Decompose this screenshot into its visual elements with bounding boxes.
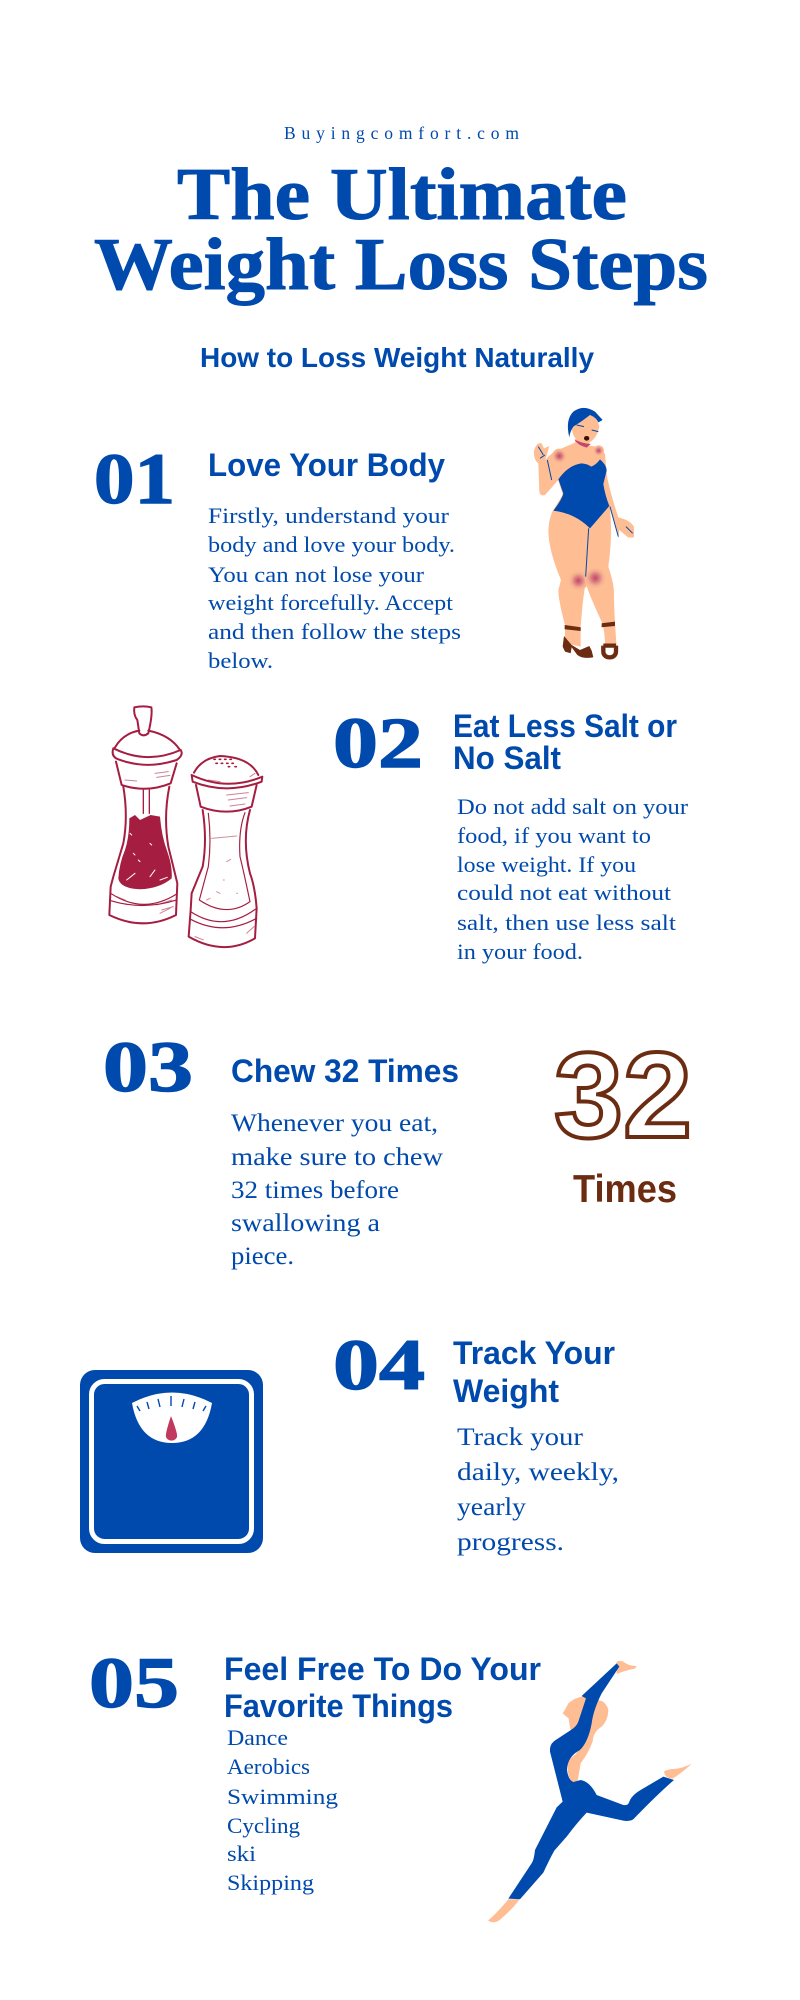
panel: step 1 love your body	[94, 408, 634, 673]
number 01: 01	[94, 439, 175, 519]
panel: step 3 chew 32 times	[103, 1027, 692, 1270]
body text: You can not lose your	[208, 562, 425, 587]
body text: lose weight. If you	[457, 852, 636, 877]
body text: make sure to chew	[231, 1142, 444, 1171]
heading: Chew 32 Times	[231, 1053, 459, 1089]
activity list: Cycling	[227, 1813, 300, 1838]
header	[94, 123, 708, 373]
body text: Firstly, understand your	[208, 503, 450, 528]
activity list	[227, 1725, 338, 1895]
activity list: Skipping	[227, 1870, 314, 1895]
body text: food, if you want to	[457, 823, 651, 848]
panel: step 5 favorite things	[89, 1643, 692, 1922]
heading	[453, 1335, 615, 1409]
body text: below.	[208, 648, 273, 673]
body text: Track your	[457, 1422, 584, 1451]
outlined number 32: 32	[554, 1027, 692, 1163]
site name: Buyingcomfort.com	[284, 123, 519, 143]
body text: progress.	[457, 1527, 564, 1556]
label times: Times	[573, 1168, 677, 1211]
heading: Track Your	[453, 1335, 615, 1371]
activity list: Dance	[227, 1725, 288, 1750]
heading	[453, 708, 677, 776]
body text	[457, 1422, 619, 1556]
body text	[231, 1108, 444, 1270]
callout: 32 times	[554, 1027, 692, 1211]
body text: body and love your body.	[208, 532, 455, 557]
body text: could not eat without	[457, 880, 672, 905]
subtitle: How to Loss Weight Naturally	[200, 342, 594, 373]
body text: and then follow the steps	[208, 619, 461, 644]
heading: Love Your Body	[208, 447, 445, 483]
icon: bathroom scale	[80, 1370, 263, 1553]
body text	[208, 503, 461, 673]
body text: swallowing a	[231, 1208, 380, 1237]
title	[94, 154, 708, 306]
number 03: 03	[103, 1027, 193, 1107]
heading: Feel Free To Do Your	[224, 1651, 541, 1687]
heading	[224, 1651, 541, 1724]
activity list: Aerobics	[227, 1754, 310, 1779]
number 05: 05	[89, 1643, 179, 1723]
body text: Do not add salt on your	[457, 794, 689, 819]
panel: step 2 eat less salt	[109, 703, 689, 964]
heading: Weight	[453, 1373, 559, 1409]
heading: Eat Less Salt or	[453, 708, 677, 744]
body text	[457, 794, 689, 964]
salt shaker	[189, 756, 262, 947]
icon: woman in blue swimsuit	[534, 408, 634, 658]
activity list: ski	[227, 1841, 256, 1866]
scale needle	[166, 1416, 177, 1441]
heading: Favorite Things	[224, 1688, 453, 1724]
body text: yearly	[457, 1492, 526, 1521]
number 02: 02	[333, 703, 423, 783]
heading: No Salt	[453, 740, 561, 776]
title: The Ultimate	[177, 154, 627, 236]
icon: leaping dancer	[488, 1661, 692, 1922]
body text: piece.	[231, 1241, 294, 1270]
activity list: Swimming	[227, 1784, 338, 1809]
number 04: 04	[333, 1325, 425, 1405]
scale dial	[132, 1392, 212, 1443]
icon: pepper mill and salt shaker	[109, 706, 262, 947]
body text: weight forcefully. Accept	[208, 590, 454, 615]
pepper mill	[109, 706, 182, 923]
body text: 32 times before	[231, 1175, 399, 1204]
panel: step 4 track your weight	[80, 1325, 619, 1556]
body text: Whenever you eat,	[231, 1108, 438, 1137]
body text: daily, weekly,	[457, 1457, 619, 1486]
body text: salt, then use less salt	[457, 910, 677, 935]
body text: in your food.	[457, 939, 583, 964]
title: Weight Loss Steps	[94, 224, 708, 306]
